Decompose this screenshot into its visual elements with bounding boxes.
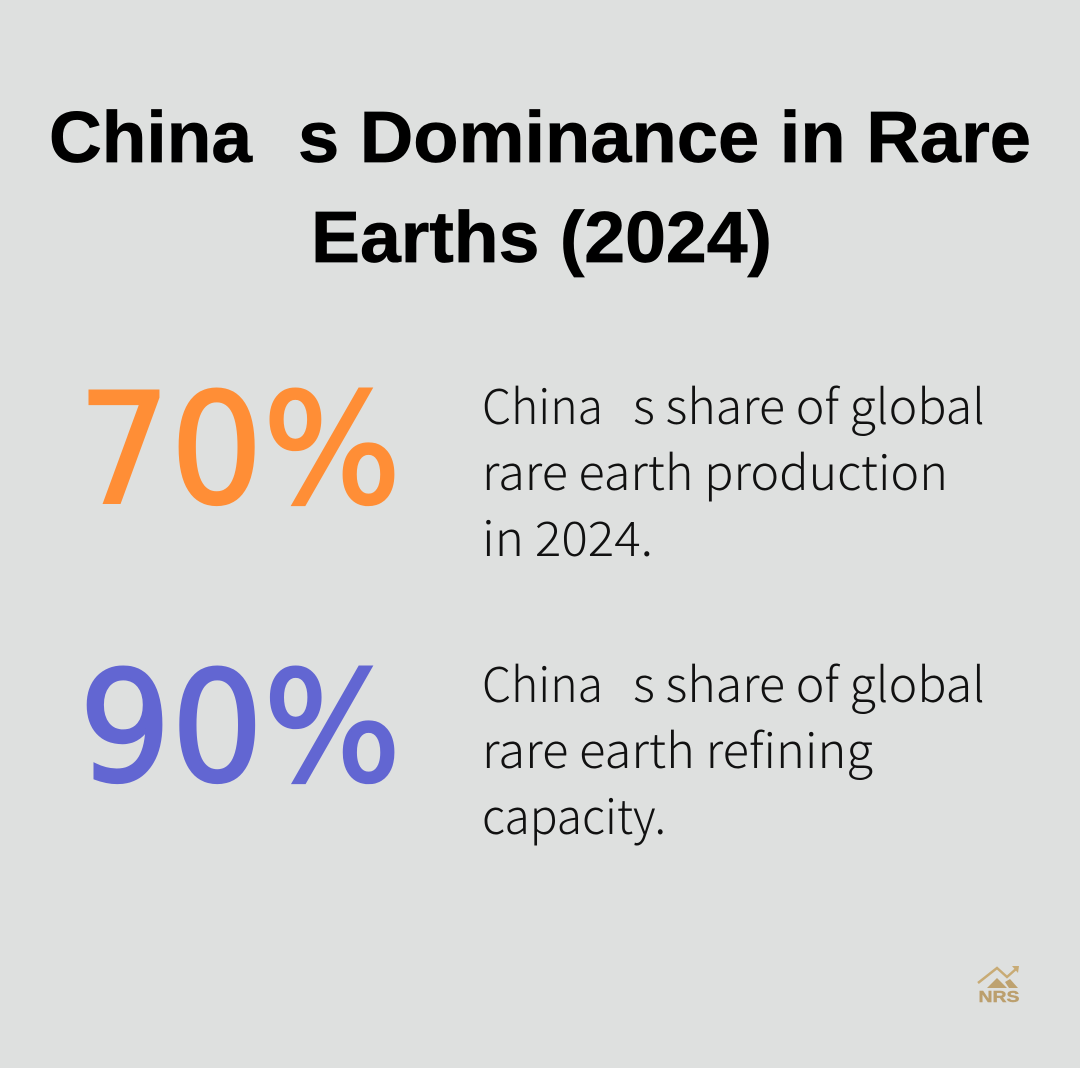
title bbox=[49, 98, 1031, 278]
title: s Dominance in Rare bbox=[298, 98, 1031, 178]
title: China bbox=[49, 98, 253, 178]
stat description: refining: s share of global bbox=[633, 646, 985, 716]
stat description: refining: capacity. bbox=[482, 778, 666, 848]
stat description: refining: rare earth refining bbox=[482, 712, 873, 782]
logo: NRS bbox=[978, 966, 1020, 1006]
stat description: production: rare earth production bbox=[482, 434, 948, 504]
title: Earths (2024) bbox=[311, 198, 772, 278]
logo text: NRS bbox=[978, 989, 1020, 1006]
stat description: production bbox=[482, 368, 985, 570]
stat description: production: China bbox=[482, 368, 603, 438]
stat description: refining: China bbox=[482, 646, 603, 716]
logo icon: roof and arrow bbox=[978, 966, 1019, 988]
stat: 70% production bbox=[78, 362, 985, 570]
stat: 90% refining bbox=[79, 640, 985, 848]
stat description: production: in 2024. bbox=[482, 500, 653, 570]
stat number: 90%: 90% bbox=[79, 640, 401, 818]
stat description: production: s share of global bbox=[633, 368, 985, 438]
stat number: 70%: 70% bbox=[78, 362, 401, 540]
stat description: refining bbox=[482, 646, 985, 848]
